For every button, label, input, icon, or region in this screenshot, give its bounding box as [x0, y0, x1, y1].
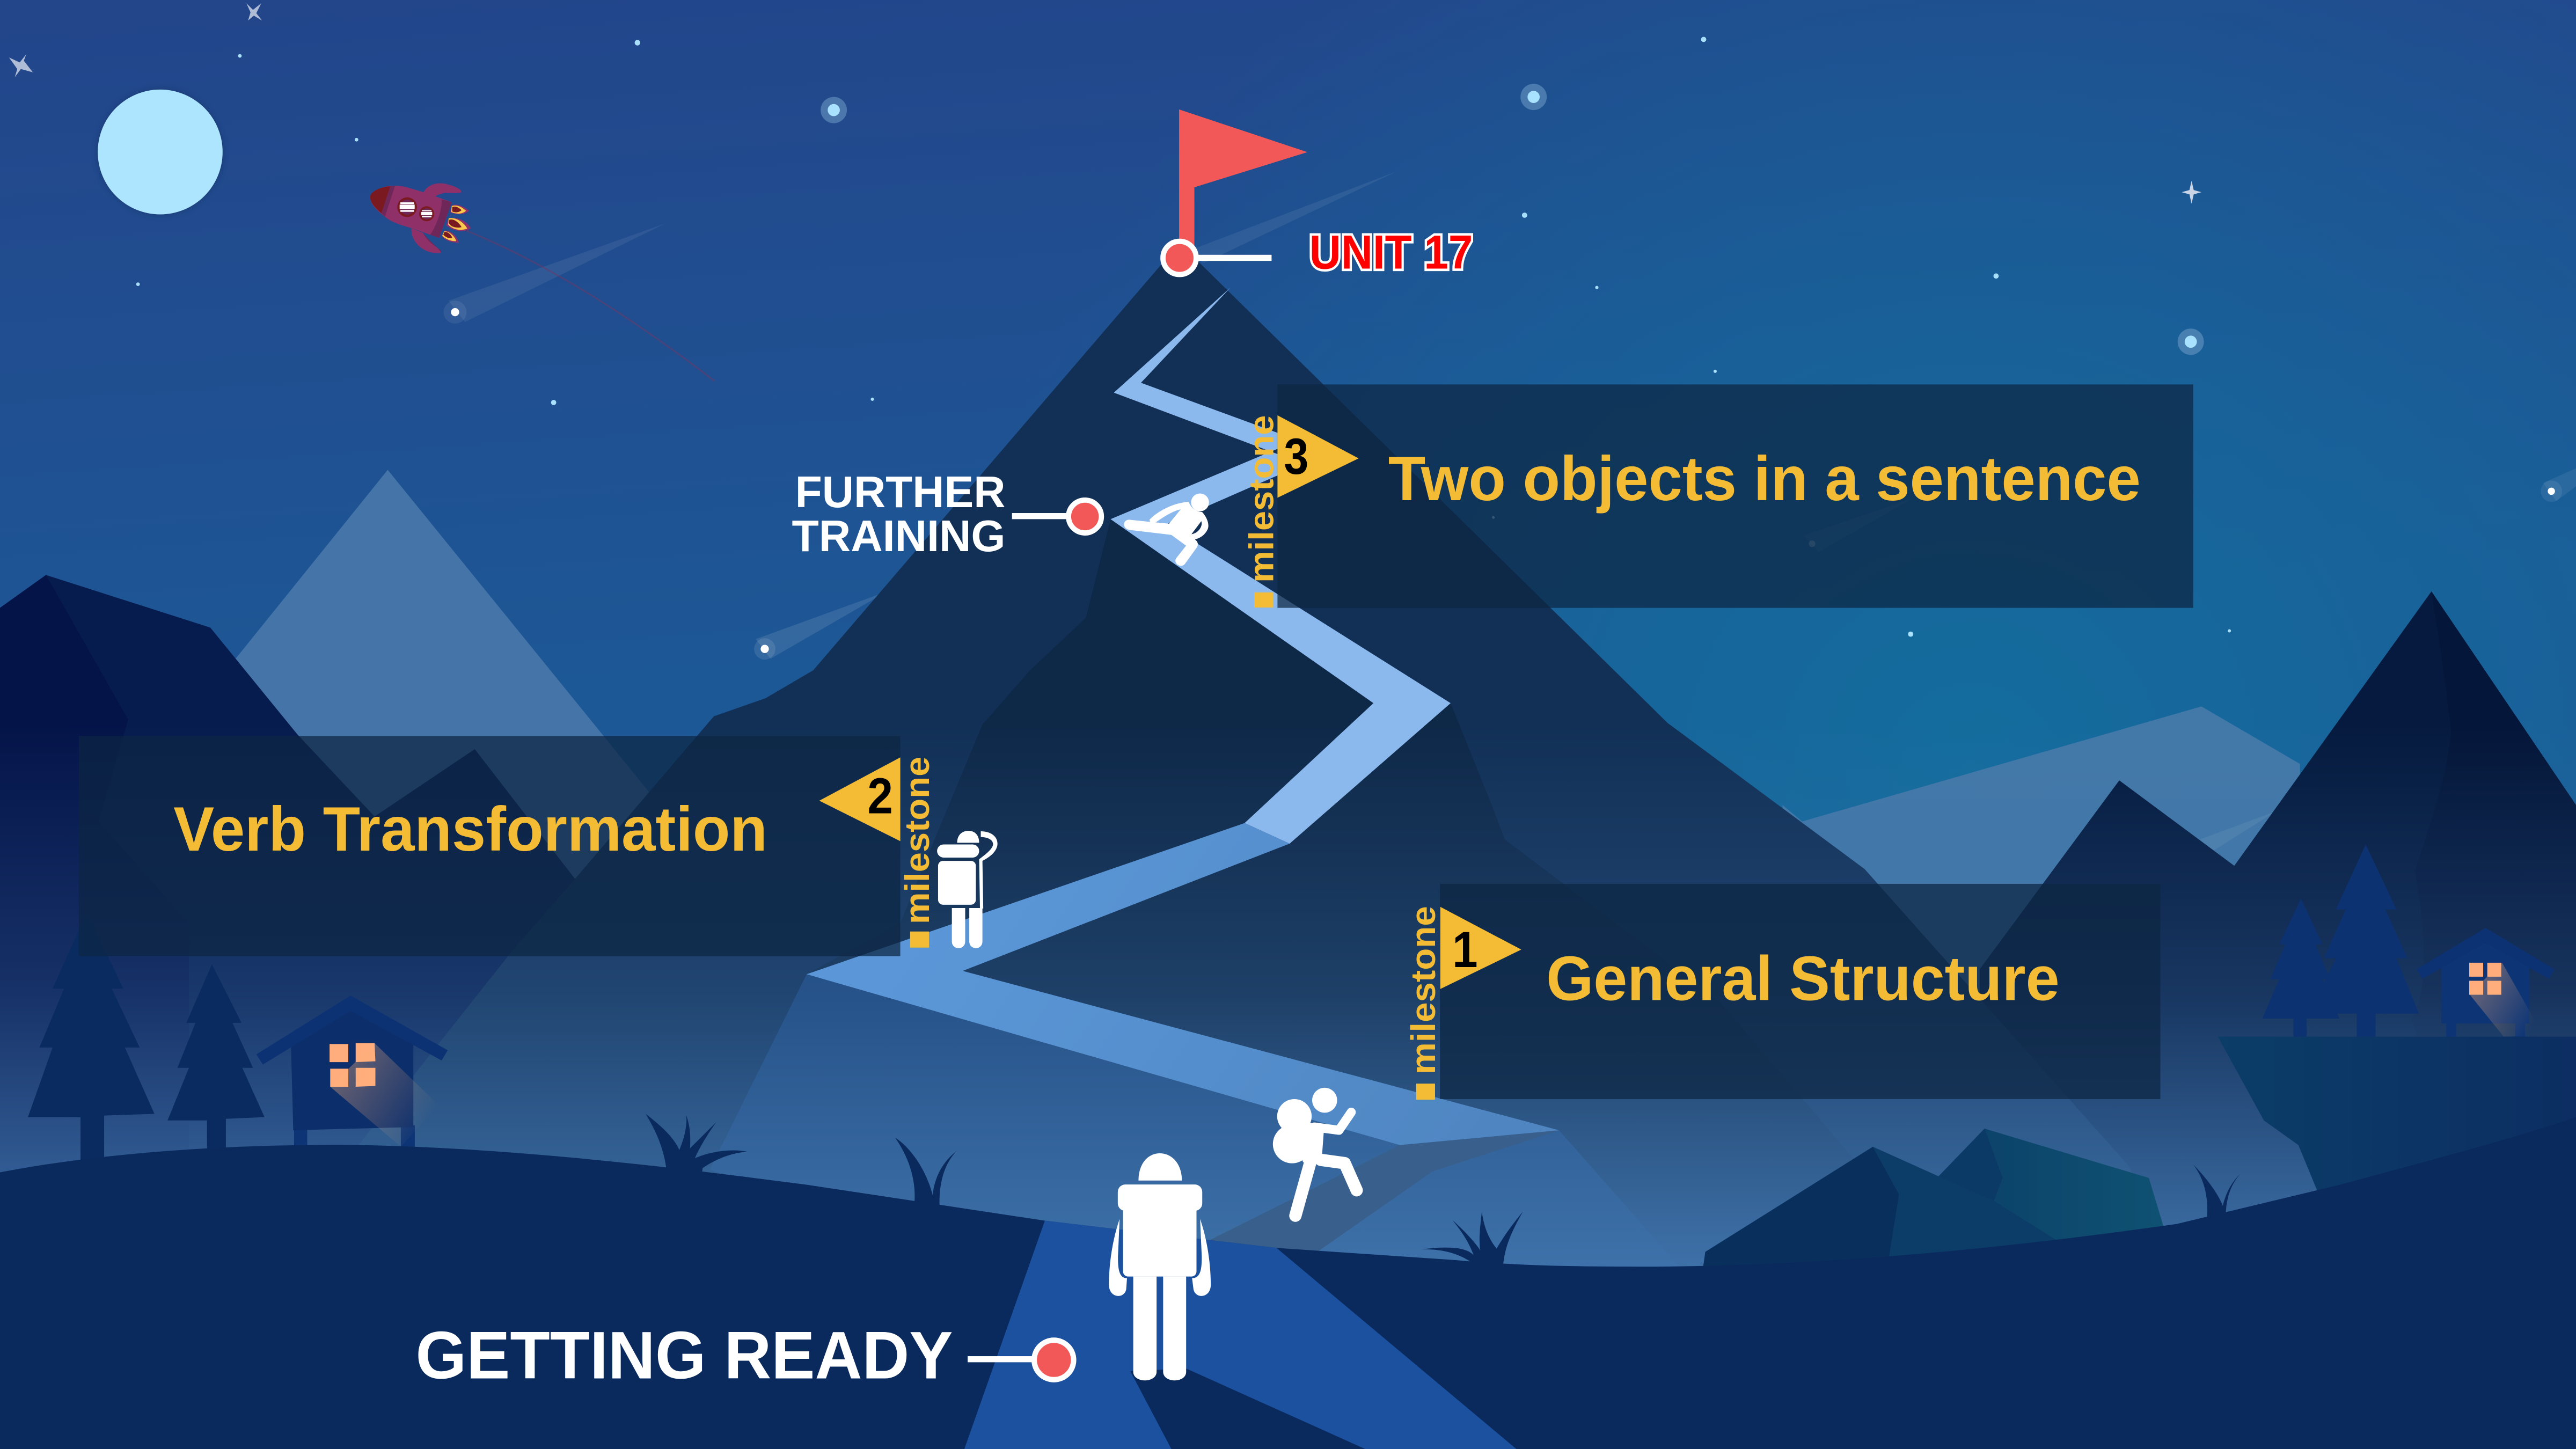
- heading: general structure: General Structure: [1546, 943, 2060, 1013]
- milestone flag 2: milestone: [898, 757, 936, 924]
- flag: [1179, 109, 1307, 263]
- rocket trail: [465, 230, 715, 381]
- label: further training: FURTHER: [795, 467, 1005, 517]
- right dark mountains: [1980, 591, 2576, 1265]
- heading: verb transformation: Verb Transformation: [173, 794, 767, 864]
- right plateau: [2218, 1037, 2576, 1249]
- right house: [2417, 928, 2555, 1037]
- left house: [257, 996, 448, 1150]
- label: further training: TRAINING: [792, 511, 1005, 561]
- milestone flag 2: [819, 757, 936, 948]
- milestone flag 1: [1404, 906, 1521, 1100]
- meteors: [444, 171, 2576, 660]
- label: unit 17: UNIT 17: [1309, 226, 1473, 279]
- milestone flag 3: 3: [1284, 428, 1308, 485]
- panel: two objects in a sentence: [1277, 384, 2193, 608]
- rocket: [370, 183, 471, 253]
- winding trail: [807, 288, 1559, 1145]
- left trees: [28, 912, 265, 1170]
- milestone flag 1: 1: [1452, 921, 1478, 978]
- main mountain: [328, 243, 2177, 1282]
- milestone flag 3: milestone: [1242, 415, 1280, 583]
- right trees: [2262, 844, 2419, 1037]
- milestone flag 3: [1242, 415, 1359, 608]
- ground hill: [0, 1117, 2576, 1449]
- icon: hiker front with backpack: [1109, 1153, 1211, 1380]
- right background light hills: [1782, 706, 2300, 1183]
- mountain shadow facet: [807, 519, 1906, 1282]
- panel: verb transformation: [79, 736, 901, 956]
- sunlit lower slope: [709, 974, 1681, 1282]
- panel: general structure: [1440, 884, 2161, 1099]
- left dark mountains: [0, 575, 575, 1183]
- milestone flag 2: 2: [867, 767, 893, 824]
- stars: [136, 37, 2231, 637]
- label: further training: [792, 467, 1005, 561]
- marker: getting ready: [968, 1340, 1074, 1380]
- halo stars: [821, 84, 2204, 355]
- grass tufts: [646, 1114, 2241, 1265]
- marker: further training: [1012, 500, 1101, 533]
- heading: two objects in a sentence: Two objects in a sentence: [1388, 443, 2141, 514]
- lower-right teal mountains: [1699, 1129, 2185, 1298]
- icon: resting hiker: [937, 831, 998, 948]
- marker: unit 17: [1163, 241, 1271, 275]
- icon: climbing hiker: [1273, 1088, 1357, 1216]
- moon: [97, 89, 223, 215]
- shadow under the trail: [1199, 1130, 1559, 1255]
- label: getting ready: GETTING READY: [415, 1317, 953, 1393]
- faint streak on right hills: [2200, 811, 2275, 851]
- left background light mountain: [197, 470, 822, 1051]
- milestone flag 1: milestone: [1404, 906, 1443, 1074]
- road: [964, 1220, 1517, 1449]
- icon: running hiker: [1124, 493, 1209, 566]
- valley mist: [0, 723, 2576, 1282]
- four-point sparkle stars: [9, 3, 2201, 204]
